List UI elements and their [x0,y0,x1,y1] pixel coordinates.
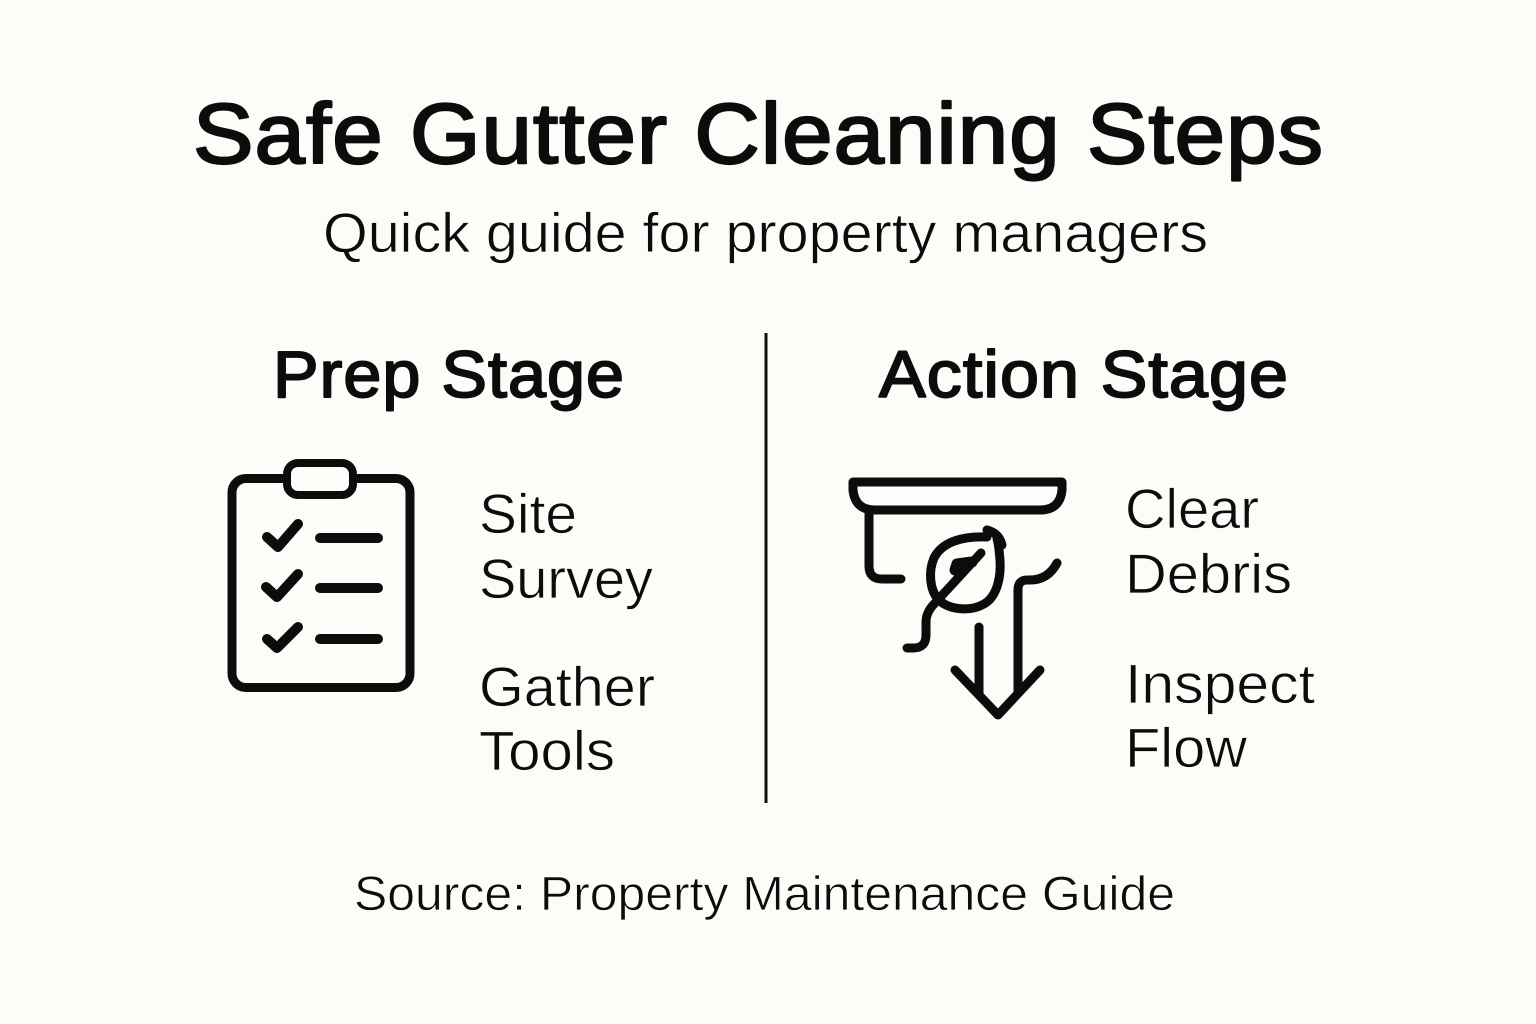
text: clear debris [1125,477,1292,605]
text: inspect flow [1125,652,1315,779]
text: inspect flow: Inspect [1125,652,1315,715]
text: site survey: Site [479,482,577,545]
title: Safe Gutter Cleaning Steps [193,87,1324,182]
panel: action stage [853,337,1315,779]
text: site survey [479,482,653,610]
panel: prep stage [232,337,655,782]
text: clear debris: Debris [1125,542,1292,605]
text: site survey: Survey [479,547,653,610]
text: clear debris: Clear [1125,477,1259,540]
text: gather tools: Tools [479,719,615,782]
heading: prep stage: Prep Stage [273,337,625,411]
source note: Source: Property Maintenance Guide [354,868,1175,921]
heading: action stage: Action Stage [879,337,1289,411]
text: gather tools [479,655,655,782]
text: gather tools: Gather [479,655,655,718]
icon: gutter with leaf and downward arrow [853,482,1062,715]
subtitle: Quick guide for property managers [323,201,1208,264]
text: inspect flow: Flow [1125,716,1248,779]
icon: clipboard checklist [232,463,410,688]
